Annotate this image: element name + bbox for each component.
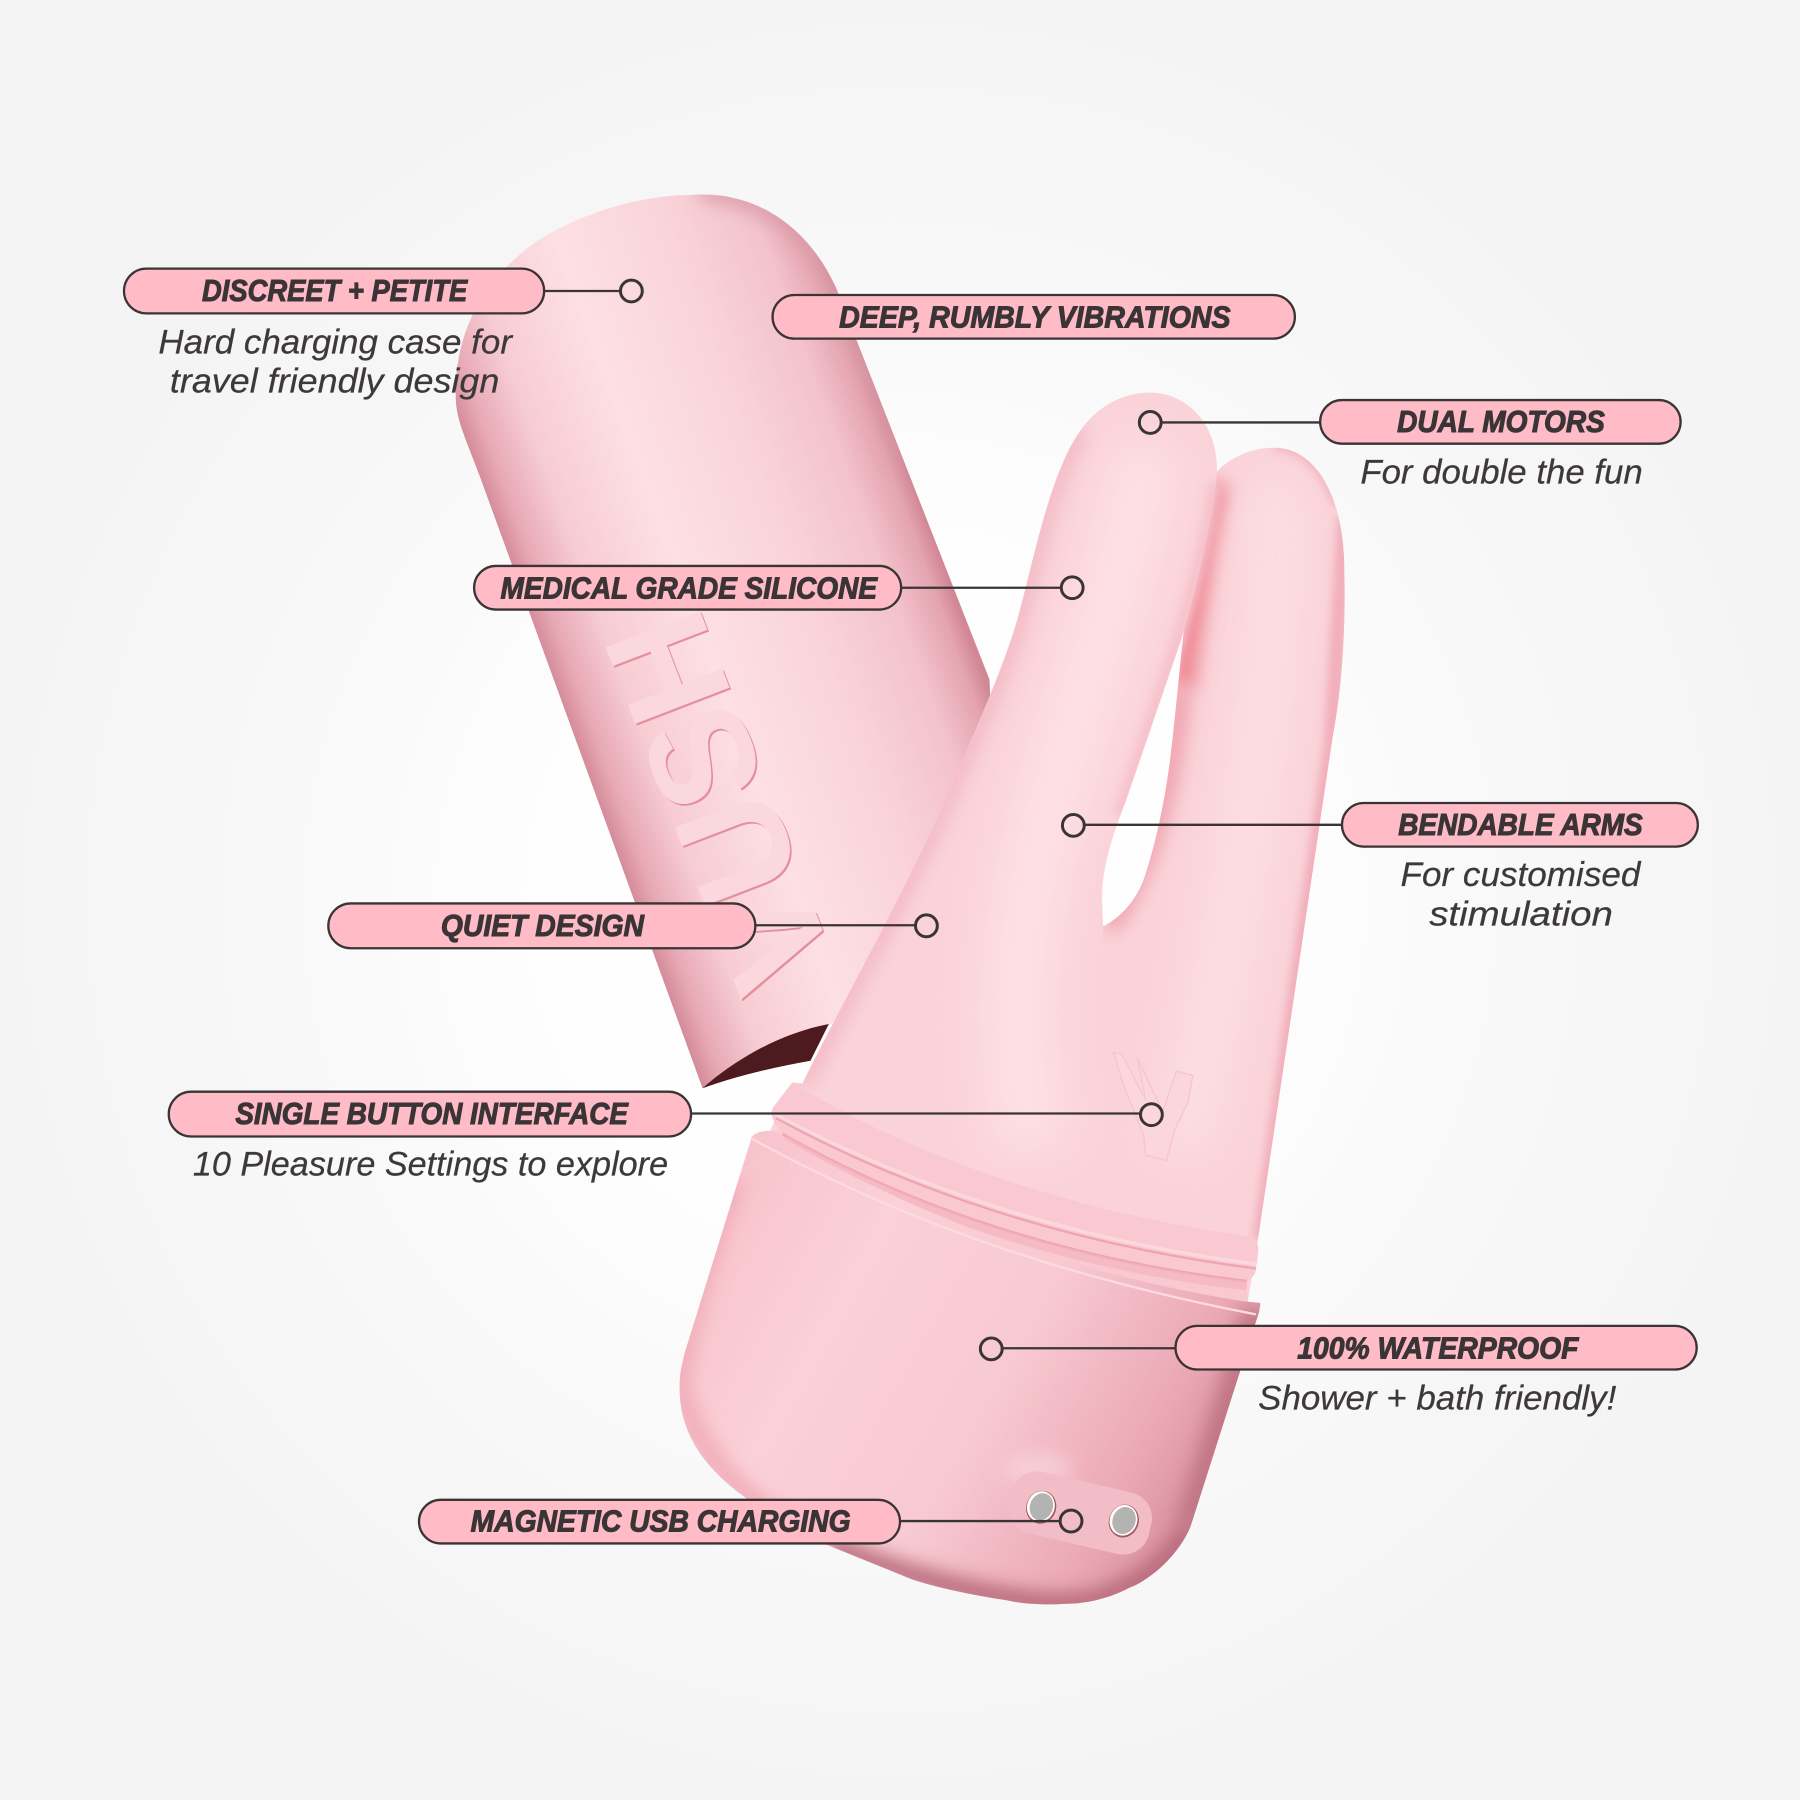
base shading xyxy=(680,1139,1259,1604)
small logo mark xyxy=(1114,1053,1193,1161)
body highlights xyxy=(802,429,1215,1148)
product: ribbed collar xyxy=(770,1083,1258,1302)
callout: single button interface: SINGLE BUTTON INTERFACE xyxy=(235,1097,630,1131)
description: For customised xyxy=(1401,856,1642,894)
callout: deep, rumbly vibrations xyxy=(773,295,1295,339)
callout: dual motors xyxy=(1139,400,1681,491)
case dome shading xyxy=(700,191,907,459)
callout: bendable arms xyxy=(1062,803,1698,933)
embossed logo xyxy=(606,612,824,1002)
first arm xyxy=(770,393,1217,1194)
description: stimulation xyxy=(1429,895,1613,933)
second arm shading xyxy=(1108,445,1345,1240)
callout: magnetic usb charging: MAGNETIC USB CHARGING xyxy=(471,1505,851,1539)
charging pad glow xyxy=(1004,1453,1073,1485)
callout: dual motors: DUAL MOTORS xyxy=(1397,405,1605,439)
device silhouette xyxy=(770,393,1345,1302)
charging contact right xyxy=(1104,1500,1144,1542)
callout: 100% waterproof: 100% WATERPROOF xyxy=(1297,1331,1580,1365)
description: 10 Pleasure Settings to explore xyxy=(193,1146,668,1184)
description: Shower + bath friendly! xyxy=(1258,1380,1617,1418)
callout: medical grade silicone: MEDICAL GRADE SILICONE xyxy=(501,571,879,605)
description: travel friendly design xyxy=(170,363,499,401)
callout: magnetic usb charging xyxy=(419,1500,1082,1543)
description: For double the fun xyxy=(1360,453,1643,491)
base lip line xyxy=(752,1139,1256,1314)
embossed logo: VUSH xyxy=(575,593,867,1013)
charging contact left xyxy=(1021,1487,1061,1528)
product: base xyxy=(680,1131,1260,1604)
callout: 100% waterproof xyxy=(980,1326,1697,1418)
callout: deep, rumbly vibrations: DEEP, RUMBLY VIBRATIONS xyxy=(839,301,1231,335)
product: dual-arm device xyxy=(770,393,1345,1302)
callout: medical grade silicone xyxy=(474,566,1083,610)
case opening xyxy=(703,1024,829,1088)
callout: quiet design xyxy=(328,903,937,948)
embossed logo: VUSH xyxy=(573,591,865,1012)
product: charging case xyxy=(456,191,999,1088)
charging pad xyxy=(1003,1466,1157,1560)
description: Hard charging case for xyxy=(158,324,514,362)
callout: discreet + petite: DISCREET + PETITE xyxy=(202,274,469,308)
callout: discreet + petite xyxy=(124,269,642,401)
callout: single button interface xyxy=(169,1092,1162,1184)
callout: quiet design: QUIET DESIGN xyxy=(441,909,645,943)
callout: bendable arms: BENDABLE ARMS xyxy=(1398,808,1643,842)
